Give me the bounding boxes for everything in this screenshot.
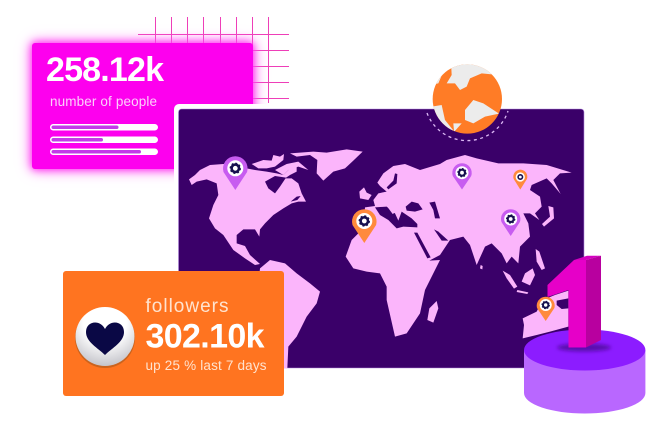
- icon: heart button: [75, 307, 135, 368]
- dashed orbit: [427, 111, 508, 141]
- pin: West Africa: [352, 209, 377, 243]
- decorative grid: [138, 17, 289, 103]
- label: up 25 % last 7 days: up 25 % last 7 days: [146, 358, 267, 373]
- pin: North America: [223, 156, 248, 190]
- islands: [427, 301, 438, 323]
- podium with number 1: [524, 256, 645, 413]
- globe: [427, 58, 508, 141]
- stat: 302.10k: 302.10k: [146, 318, 265, 356]
- map: north america and greenland: [189, 149, 363, 265]
- panel: number of people: [32, 43, 253, 169]
- map: africa and eurasia: [346, 155, 572, 337]
- number 1: [548, 256, 601, 348]
- seas: [375, 173, 448, 258]
- panel: world map: [174, 104, 586, 372]
- pin: Russia: [452, 163, 472, 190]
- label: followers: followers: [146, 296, 228, 317]
- stat: 258.12k: 258.12k: [46, 51, 164, 89]
- british isles: [359, 187, 372, 200]
- label: number of people: number of people: [50, 94, 157, 109]
- podium cylinder: [524, 350, 645, 413]
- map: australia: [523, 291, 568, 338]
- pin: Australia: [537, 297, 555, 321]
- pin: China: [501, 209, 520, 236]
- italy: [386, 204, 395, 214]
- progress bars: [50, 124, 158, 155]
- panel: followers: [63, 271, 284, 396]
- map: south america: [257, 260, 320, 368]
- pin: East Russia: [513, 170, 527, 190]
